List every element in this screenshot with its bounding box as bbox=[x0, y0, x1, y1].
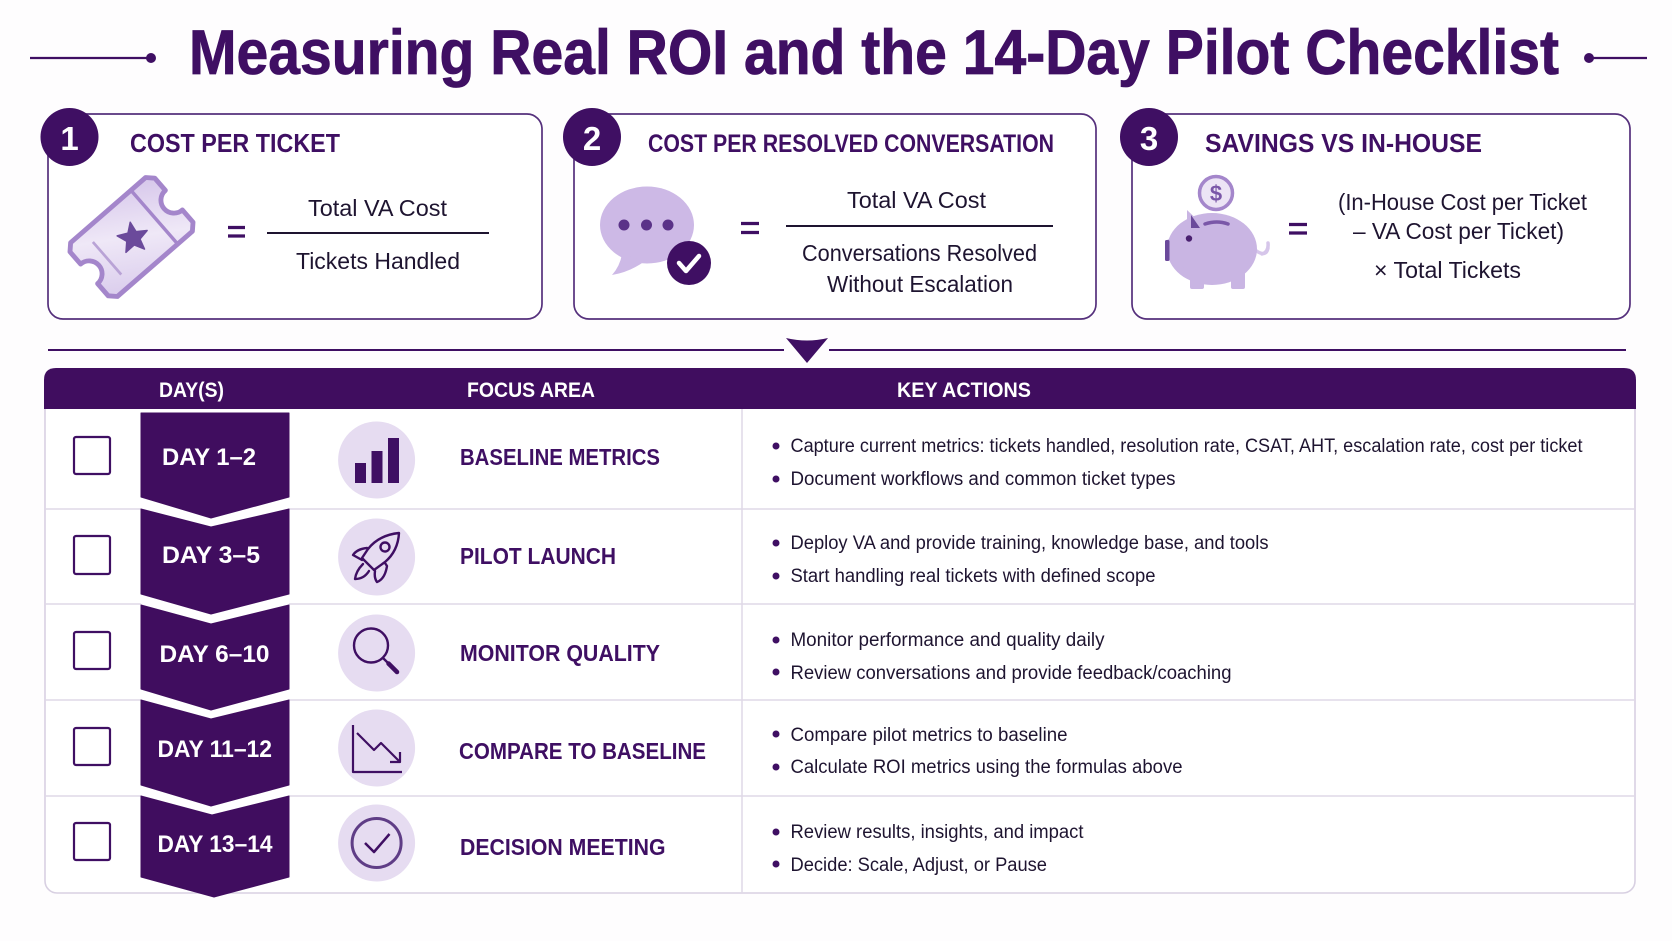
key actions: Calculate ROI metrics using the formulas above bbox=[790, 757, 1182, 778]
number badge 1: 1 bbox=[60, 120, 79, 157]
panel: savings vs in-house bbox=[1120, 108, 1630, 319]
day chevron: DAY 11–12 bbox=[158, 736, 272, 763]
icon: check circle bbox=[338, 804, 415, 882]
row 5: decision meeting bbox=[74, 796, 1084, 897]
day chevron: DAY 1–2 bbox=[162, 444, 256, 471]
key actions bbox=[772, 436, 1583, 490]
formula: cost per ticket: Total VA Cost bbox=[308, 195, 448, 221]
number badge 3: 3 bbox=[1140, 120, 1158, 157]
icon: piggy bank with coin: $ bbox=[1210, 181, 1222, 206]
formula: cost per resolved conversation: Total VA Cost bbox=[847, 187, 987, 213]
key actions: Decide: Scale, Adjust, or Pause bbox=[790, 855, 1047, 876]
key actions bbox=[772, 822, 1084, 876]
equals sign bbox=[228, 228, 245, 236]
heading: cost per ticket: COST PER TICKET bbox=[130, 128, 340, 158]
icon: ticket bbox=[65, 172, 198, 302]
focus label: BASELINE METRICS bbox=[460, 444, 660, 470]
table header: KEY ACTIONS bbox=[897, 379, 1031, 402]
day chevron: DAY 3–5 bbox=[162, 542, 260, 569]
key actions bbox=[772, 533, 1268, 587]
icon: rocket bbox=[338, 518, 415, 596]
heading: savings vs in-house: SAVINGS VS IN-HOUSE bbox=[1205, 128, 1482, 158]
icon: bar chart bbox=[338, 422, 415, 498]
key actions: Capture current metrics: tickets handled, resolution rate, CSAT, AHT, escalation rate, cost per ticket bbox=[790, 436, 1583, 457]
number badge 2: 2 bbox=[583, 120, 601, 157]
checkbox bbox=[74, 823, 110, 860]
formula: cost per resolved conversation: Without Escalation bbox=[827, 271, 1013, 297]
key actions: Review conversations and provide feedback/coaching bbox=[790, 663, 1232, 684]
heading: cost per resolved conversation: COST PER RESOLVED CONVERSATION bbox=[648, 130, 1054, 158]
row 3: monitor quality bbox=[74, 605, 1232, 710]
key actions bbox=[772, 725, 1182, 778]
equals sign bbox=[1289, 224, 1307, 233]
divider with down arrow bbox=[48, 338, 1626, 363]
number badge 1 bbox=[40, 108, 98, 166]
day chevron bbox=[141, 509, 289, 614]
panel: cost per ticket bbox=[40, 108, 542, 319]
formula: cost per resolved conversation: Conversations Resolved bbox=[802, 240, 1037, 266]
checklist table bbox=[44, 368, 1636, 897]
formula: savings vs in-house: × Total Tickets bbox=[1374, 257, 1521, 283]
icon: magnifying glass bbox=[338, 614, 415, 692]
focus label: PILOT LAUNCH bbox=[460, 543, 616, 569]
checkbox bbox=[74, 632, 110, 669]
key actions: Compare pilot metrics to baseline bbox=[790, 725, 1068, 746]
formula: savings vs in-house bbox=[1338, 189, 1588, 283]
focus label: DECISION MEETING bbox=[460, 834, 666, 860]
formula: savings vs in-house: (In-House Cost per Ticket bbox=[1338, 189, 1588, 215]
key actions: Monitor performance and quality daily bbox=[790, 630, 1105, 651]
icon: declining chart bbox=[338, 710, 415, 786]
formula: cost per ticket: Tickets Handled bbox=[296, 248, 460, 274]
table header bbox=[44, 368, 1636, 409]
day chevron bbox=[141, 605, 289, 710]
day chevron bbox=[141, 700, 289, 806]
row 1: baseline metrics bbox=[74, 413, 1583, 518]
title: Measuring Real ROI and the 14-Day Pilot Checklist bbox=[189, 18, 1559, 88]
key actions: Review results, insights, and impact bbox=[790, 822, 1084, 843]
day chevron: DAY 13–14 bbox=[158, 831, 273, 858]
checkbox bbox=[74, 536, 110, 574]
formula: cost per resolved conversation bbox=[786, 187, 1053, 297]
checkbox bbox=[74, 437, 110, 474]
table header: DAY(S) bbox=[159, 379, 224, 402]
equals sign bbox=[741, 224, 759, 232]
day chevron: DAY 6–10 bbox=[160, 641, 270, 668]
table header: FOCUS AREA bbox=[467, 379, 595, 402]
day chevron bbox=[141, 413, 289, 518]
focus label: MONITOR QUALITY bbox=[460, 640, 660, 666]
checkbox bbox=[74, 728, 110, 765]
row 4: compare to baseline bbox=[74, 700, 1182, 806]
focus label: COMPARE TO BASELINE bbox=[459, 738, 706, 764]
key actions: Document workflows and common ticket types bbox=[790, 469, 1176, 490]
panel: cost per resolved conversation bbox=[563, 108, 1096, 319]
day chevron bbox=[141, 796, 289, 897]
number badge 3 bbox=[1120, 108, 1178, 166]
key actions: Start handling real tickets with defined scope bbox=[790, 566, 1156, 587]
icon: speech bubble with check bbox=[600, 186, 711, 285]
formula: cost per ticket bbox=[267, 195, 489, 274]
number badge 2 bbox=[563, 108, 621, 166]
key actions bbox=[772, 630, 1232, 684]
icon: piggy bank with coin bbox=[1165, 176, 1268, 289]
formula: savings vs in-house: – VA Cost per Ticket) bbox=[1353, 218, 1564, 244]
key actions: Deploy VA and provide training, knowledge base, and tools bbox=[790, 533, 1268, 554]
row 2: pilot launch bbox=[74, 509, 1268, 614]
